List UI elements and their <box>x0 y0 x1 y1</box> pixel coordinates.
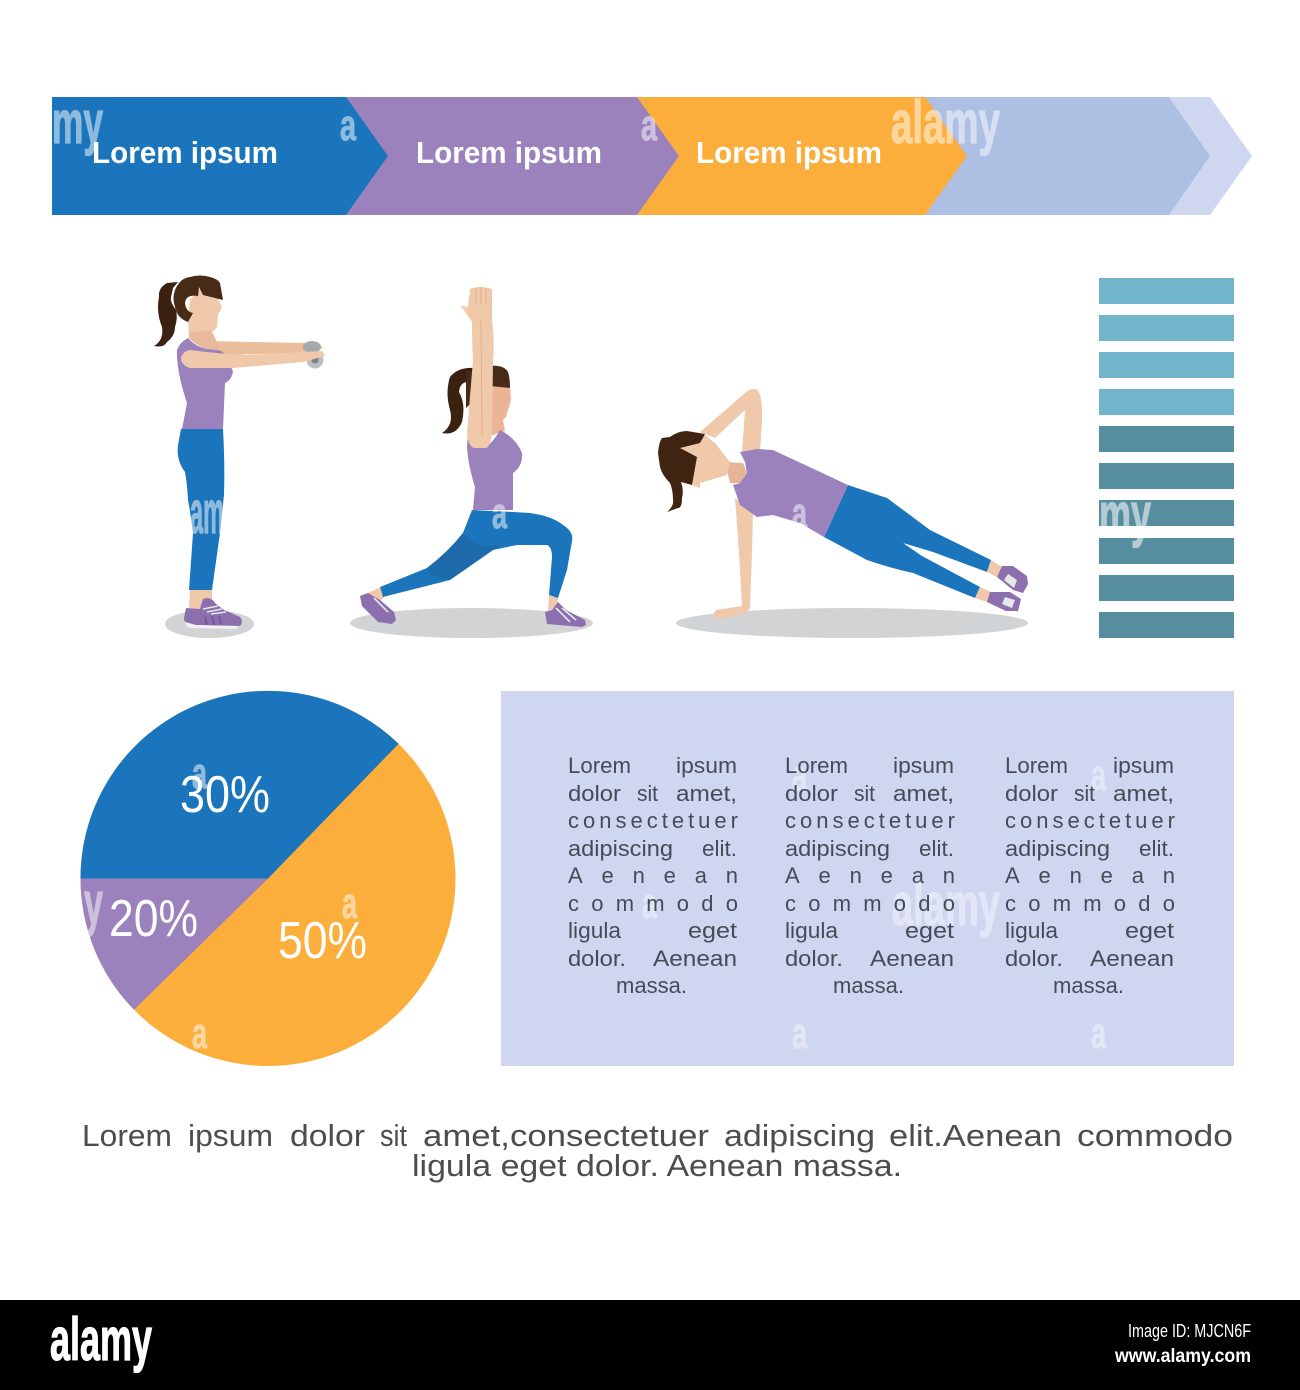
hair <box>466 366 510 408</box>
text column 1: Aenean <box>653 946 737 971</box>
text column 1: amet, <box>676 781 737 806</box>
pie watermarks: a <box>192 1009 207 1058</box>
text column 1 <box>568 753 738 998</box>
text column 3: sit <box>1074 781 1095 806</box>
banner watermarks: alamy <box>891 89 1000 156</box>
figure: standing woman with dumbbell <box>154 276 325 638</box>
panel watermarks: a <box>792 1009 807 1058</box>
figure watermarks: a <box>792 489 807 538</box>
text column 3: amet, <box>1113 781 1174 806</box>
website: www.alamy.com <box>1114 1346 1251 1367</box>
text column 3: massa. <box>1053 973 1124 998</box>
text column 1: adipiscing <box>568 836 673 861</box>
color bars <box>1099 278 1234 638</box>
text column 1: commodo <box>568 891 738 916</box>
sneaker laces <box>203 606 226 614</box>
text column 3: eget <box>1125 918 1174 943</box>
text column 3: dolor <box>1005 781 1058 806</box>
label: 20%: 20% <box>109 890 198 948</box>
bottom caption: elit.Aenean <box>889 1118 1062 1153</box>
text column 1: ligula <box>568 918 622 943</box>
pie watermarks <box>84 749 357 1058</box>
text column 1: eget <box>688 918 737 943</box>
ankles <box>189 590 212 610</box>
figure: side plank <box>658 389 1028 638</box>
arrow label 3: Lorem ipsum <box>696 135 882 170</box>
text column 1: dolor. <box>568 946 626 971</box>
sneaker sole <box>185 622 238 629</box>
text column 3: ipsum <box>1113 753 1174 778</box>
sneakers <box>184 598 242 626</box>
text column 2: Lorem <box>785 753 848 778</box>
floor shadow <box>165 610 254 638</box>
sneaker laces <box>374 598 576 622</box>
text column 2 <box>785 753 955 998</box>
text column 3: consectetuer <box>1005 808 1175 833</box>
text column 2: ipsum <box>893 753 954 778</box>
panel watermarks: alamy <box>892 871 1000 938</box>
neck <box>725 462 747 483</box>
ankles <box>548 595 558 612</box>
leggings <box>380 510 572 598</box>
text column 3: Aenean <box>1005 863 1175 888</box>
text column 3: Lorem <box>1005 753 1068 778</box>
fingers <box>476 287 486 436</box>
arrow label 2: Lorem ipsum <box>416 135 602 170</box>
ponytail <box>442 368 480 434</box>
slice: 20% purple <box>80 878 268 1010</box>
sneakers <box>360 593 396 624</box>
footer bar <box>0 1300 1300 1390</box>
text column 2: elit. <box>919 836 954 861</box>
text column 2: Aenean <box>785 863 955 888</box>
panel watermarks: a <box>792 751 807 800</box>
light teal bars <box>1099 278 1234 415</box>
dumbbell <box>303 341 321 353</box>
text column 2: sit <box>854 781 875 806</box>
ponytail <box>154 282 178 346</box>
arrow segment: lightest <box>1100 97 1252 215</box>
bar watermark: my <box>1099 481 1151 548</box>
text column 1: consectetuer <box>568 808 738 833</box>
banner watermarks <box>52 89 1000 156</box>
text column 1: massa. <box>616 973 687 998</box>
text column 2: dolor. <box>785 946 843 971</box>
sneakers <box>997 566 1028 593</box>
pie watermarks: y <box>84 870 103 937</box>
text column 3: dolor. <box>1005 946 1063 971</box>
bottom caption <box>82 1118 1233 1183</box>
text column 3: Aenean <box>1090 946 1174 971</box>
tank top <box>467 430 522 510</box>
text column 2: Aenean <box>870 946 954 971</box>
neck shadow <box>189 330 222 352</box>
tank top <box>177 338 233 429</box>
text column 1: dolor <box>568 781 621 806</box>
pie watermarks: a <box>192 749 207 798</box>
slice: 30% blue <box>80 691 399 878</box>
text panel <box>501 691 1234 1066</box>
label: 50%: 50% <box>278 912 367 970</box>
ankles <box>987 560 1002 577</box>
bottom caption: sit <box>380 1118 407 1153</box>
figure watermarks: a <box>492 489 507 538</box>
footer logo: alamy <box>50 1306 152 1373</box>
text column 2: adipiscing <box>785 836 890 861</box>
raised arm <box>700 389 762 452</box>
bottom caption: ipsum <box>188 1118 273 1153</box>
figure watermarks: am <box>190 479 224 546</box>
neck and face <box>188 288 222 352</box>
arrow label 1: Lorem ipsum <box>92 135 278 170</box>
leggings shading <box>427 533 500 580</box>
back arm <box>205 341 323 355</box>
text column 3: adipiscing <box>1005 836 1110 861</box>
panel watermarks: a <box>1091 751 1106 800</box>
arrow banner <box>52 89 1252 215</box>
panel background <box>501 691 1234 1066</box>
raised arms <box>460 287 494 448</box>
face <box>680 435 730 488</box>
text column 2: consectetuer <box>785 808 955 833</box>
text column 1: sit <box>637 781 658 806</box>
text column 2: massa. <box>833 973 904 998</box>
hair <box>658 431 705 512</box>
arrow segment: blue <box>52 97 388 215</box>
text column 1: Lorem <box>568 753 631 778</box>
arrow segment: orange <box>620 97 967 215</box>
label: 30%: 30% <box>180 766 270 824</box>
arrow segment: light blue <box>900 97 1210 215</box>
banner watermarks: a <box>641 101 657 150</box>
bottom caption: adipiscing <box>724 1118 875 1153</box>
panel watermarks: a <box>642 879 657 928</box>
sneaker laces <box>1002 574 1017 608</box>
text column 3 <box>1005 753 1175 998</box>
text column 2: commodo <box>785 891 955 916</box>
panel watermarks <box>642 751 1106 1058</box>
text column 3: commodo <box>1005 891 1175 916</box>
text column 3: elit. <box>1139 836 1174 861</box>
hair <box>174 276 223 322</box>
figure: lunge with raised arms <box>350 287 593 638</box>
face and neck <box>486 385 511 436</box>
arrow segment: purple <box>330 97 679 215</box>
floor shadow <box>350 608 593 638</box>
image id: Image ID: MJCN6F <box>1128 1321 1251 1341</box>
text column 2: eget <box>905 918 954 943</box>
floor shadow <box>676 608 1028 638</box>
pie chart <box>80 691 455 1066</box>
text column 1: ipsum <box>676 753 737 778</box>
text column 1: Aenean <box>568 863 738 888</box>
bottom caption: Lorem <box>82 1118 172 1153</box>
banner watermarks: a <box>340 101 356 150</box>
dark teal bars <box>1099 426 1234 638</box>
pie watermarks: a <box>342 879 357 928</box>
text column 3: ligula <box>1005 918 1059 943</box>
bottom caption: dolor <box>290 1118 365 1153</box>
lower supporting arm <box>712 498 753 620</box>
text column 2: dolor <box>785 781 838 806</box>
tank top <box>733 449 848 537</box>
text column 2: ligula <box>785 918 839 943</box>
text column 2: amet, <box>893 781 954 806</box>
front arm <box>181 350 325 368</box>
figure watermarks <box>190 479 807 546</box>
bottom caption: commodo <box>1077 1118 1233 1153</box>
leggings <box>178 429 224 590</box>
panel watermarks: a <box>1091 1009 1106 1058</box>
bottom caption: ligula eget dolor. Aenean massa. <box>412 1148 902 1183</box>
banner watermarks: my <box>52 89 103 156</box>
bottom caption: amet,consectetuer <box>423 1118 709 1153</box>
slice: 50% orange <box>80 691 456 1066</box>
text column 1: elit. <box>702 836 737 861</box>
leggings <box>824 485 991 598</box>
